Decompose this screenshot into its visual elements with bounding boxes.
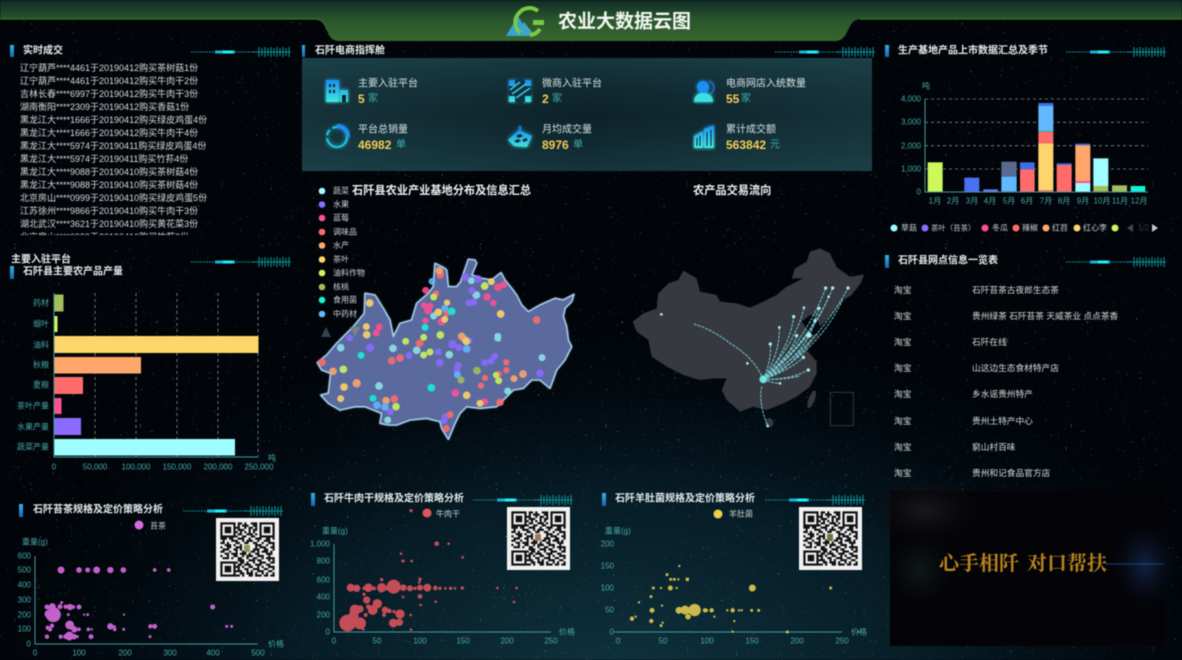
- video panel: 心手相阡 对口帮扶: [939, 552, 1107, 575]
- chart: stacked bars: 3月: [966, 196, 978, 206]
- heading: crop output: [10, 257, 291, 279]
- video panel: [865, 475, 1177, 646]
- table: outlets: 淘宝: [894, 336, 912, 347]
- chart: horizontal bars: 茶叶产量: [17, 400, 49, 410]
- chart: morel scatter: [601, 526, 867, 646]
- header banner: [0, 0, 1182, 41]
- map: China with flow lines: [633, 248, 864, 427]
- legend: base types: 水果: [333, 199, 349, 209]
- legend: production: 辣椒: [1022, 222, 1038, 232]
- chart: beef scatter: [310, 510, 575, 646]
- chart: horizontal bars: 夏粮: [33, 380, 49, 390]
- icon: person: [694, 81, 714, 102]
- chart: tea scatter: 价格: [268, 638, 284, 648]
- heading: morel: [602, 492, 865, 506]
- chart: stacked bars: 5月: [1003, 196, 1015, 206]
- chart: beef scatter: 0: [326, 628, 331, 636]
- metric: online stores: 电商网店入统数量: [726, 76, 806, 90]
- chart: stacked bars: 2,000: [901, 142, 922, 150]
- chart: morel scatter: 250: [835, 636, 849, 646]
- chart: horizontal bars: 150,000: [163, 462, 192, 472]
- panel: county base map: [317, 183, 574, 439]
- legend: beef: 牛肉干: [436, 508, 460, 518]
- metric: wechat platforms: 微商入驻平台: [542, 76, 602, 90]
- chart: tea scatter: 0: [27, 640, 32, 648]
- chart: stacked bars: 8月: [1058, 196, 1070, 206]
- legend: production: 冬瓜: [992, 222, 1008, 232]
- chart: horizontal bars: 药材: [33, 298, 49, 308]
- chart: stacked bars: 2月: [947, 196, 959, 206]
- icon: towers: [694, 125, 714, 148]
- metric: wechat platforms: 家: [552, 92, 562, 104]
- chart: morel scatter: 100: [700, 636, 714, 646]
- panel: e-commerce dashboard: [302, 44, 875, 171]
- metric: total turnover: 累计成交额: [726, 122, 776, 136]
- chart: stacked bars: 1,000: [901, 164, 922, 174]
- table: outlets: 窮山村百味: [972, 441, 1016, 452]
- metric: total sales: 单: [396, 138, 406, 150]
- chart: horizontal bars: 50,000: [83, 462, 108, 472]
- chart: horizontal bars: 油料: [33, 340, 49, 350]
- chart: beef scatter: 价格: [559, 626, 575, 636]
- heading: beef: 石阡牛肉干规格及定价策略分析: [324, 492, 464, 504]
- chart: horizontal bars: 100,000: [122, 462, 151, 472]
- chart: beef scatter: 150: [456, 636, 470, 646]
- metric: wechat platforms: [509, 76, 602, 106]
- legend: base types: 核桃: [333, 282, 349, 292]
- metric: total sales: 46982: [358, 138, 392, 152]
- metric: monthly volume: 月均成交量: [542, 122, 592, 136]
- chart: beef scatter: 250: [544, 636, 558, 646]
- legend: beef: [422, 508, 460, 518]
- legend: base types: 油料作物: [333, 268, 365, 278]
- chart: beef scatter: 100: [413, 636, 427, 646]
- table: outlets: 淘宝: [894, 310, 912, 321]
- heading: trade flow: 农产品交易流向: [693, 183, 771, 197]
- chart: beef scatter: 200: [317, 610, 331, 620]
- legend: tea: 苔茶: [150, 520, 166, 530]
- QR code: tea: [216, 518, 279, 581]
- text block: deal list: 黑龙江大****5974于20190411购买绿皮鸡蛋4份: [20, 140, 206, 151]
- legend: production: 红苕: [1052, 222, 1068, 232]
- chart: horizontal bars: 200,000: [204, 462, 233, 472]
- chart: stacked bars: [901, 80, 1148, 206]
- chart: morel scatter: 50: [605, 606, 615, 614]
- panel: production by month: [885, 44, 1166, 232]
- panel background: [302, 58, 872, 171]
- table: outlets: 淘宝: [894, 362, 912, 373]
- metric: monthly volume: 单: [573, 138, 583, 150]
- heading: outlets: 石阡县网点信息一览表: [898, 254, 998, 266]
- legend: tea: [134, 520, 166, 530]
- chart: morel scatter: 150: [745, 636, 759, 646]
- heading: crop output: 石阡县主要农产品产量: [23, 264, 123, 278]
- chart: horizontal bars: 水果产量: [17, 422, 49, 432]
- chart: morel scatter: 50: [659, 636, 668, 646]
- chart: tea scatter: 300: [163, 648, 177, 658]
- text block: deal list: 北京房山****0999于20190410购买绿皮鸡蛋5份: [20, 192, 207, 203]
- heading: production: 生产基地产品上市数据汇总及季节: [898, 44, 1048, 56]
- chart: morel scatter: 200: [790, 636, 804, 646]
- metric: main platforms: 家: [368, 92, 378, 104]
- metric: main platforms: [326, 76, 418, 106]
- metric: online stores: 家: [741, 92, 751, 104]
- metric: total turnover: [694, 122, 780, 152]
- table: outlets: 乡水谣贵州特产: [972, 388, 1033, 399]
- chart: tea scatter: 600: [18, 552, 32, 560]
- legend: base types: 水产: [333, 240, 349, 250]
- chart: stacked bars: 10月: [1094, 196, 1110, 206]
- chart: beef scatter: 50: [373, 636, 382, 646]
- chart: horizontal bars: [17, 293, 276, 472]
- table: outlets: 石阡在线: [972, 336, 1007, 347]
- table: outlets: 山这边生态食材特产店: [972, 362, 1059, 373]
- chart: stacked bars: 9月: [1077, 196, 1089, 206]
- icon: building: [326, 80, 348, 102]
- panel: outlet table: [885, 254, 1166, 478]
- chart: tea scatter: 100: [72, 648, 86, 658]
- table: outlets: 贵州和记食品官方店: [972, 467, 1050, 478]
- text block: deal list: 辽宁葫芦****4461于20190412购买牛肉干2份: [20, 75, 198, 86]
- table: outlets: 淘宝: [894, 284, 912, 295]
- panel: trade flow map: [633, 183, 864, 427]
- chart: stacked bars: 11月: [1112, 196, 1128, 206]
- text block: deal list: 江苏徐州****9866于20190410购买牛肉干3份: [20, 205, 198, 216]
- metric: main platforms: 5: [358, 92, 365, 106]
- panel: main crop output: [10, 252, 291, 472]
- chart: beef scatter: 1,000: [310, 540, 331, 548]
- chart: beef scatter: 200: [500, 636, 514, 646]
- title: 农业大数据云图: [558, 10, 691, 32]
- heading: platforms: 主要入驻平台: [11, 252, 71, 266]
- chart: morel scatter: 200: [601, 540, 615, 548]
- legend: base types: 中药材: [333, 308, 357, 318]
- chart: morel scatter: 重量(g): [605, 526, 631, 536]
- metric: main platforms: 主要入驻平台: [358, 76, 418, 90]
- heading: outlets: [885, 254, 1166, 268]
- map: county outline with points: [317, 259, 574, 439]
- heading: tea: [19, 502, 283, 517]
- chart: stacked bars: 12月: [1131, 196, 1147, 206]
- chart: horizontal bars: 吨: [268, 452, 276, 462]
- chart: beef scatter: 400: [317, 592, 331, 602]
- chart: tea scatter: 300: [18, 596, 32, 604]
- icon: tray: [508, 126, 532, 147]
- chart: beef scatter: 600: [317, 576, 331, 584]
- panel: realtime deals: [10, 44, 291, 242]
- legend: base types: 茶叶: [333, 254, 349, 264]
- legend: morel: [714, 508, 753, 518]
- table: outlets: 贵州土特产中心: [972, 415, 1033, 426]
- chart: stacked bars: 3,000: [901, 118, 922, 126]
- text block: deal list: 黑龙江大****1666于20190412购买绿皮鸡蛋4份: [20, 114, 207, 125]
- chart: tea scatter: 200: [118, 648, 132, 658]
- chart: morel scatter: 0: [616, 636, 621, 646]
- text block: deal list: 黑龙江大****9088于20190410购买茶树菇4份: [20, 179, 198, 190]
- icon: grid diagonal: [509, 80, 531, 102]
- table: outlets: 淘宝: [894, 415, 912, 426]
- text block: deal list: 吉林长春****6997于20190412购买牛肉干3份: [20, 88, 198, 99]
- QR code: beef: [507, 507, 570, 570]
- legend: base types: 蔬菜: [333, 186, 349, 196]
- metric: total turnover: 元: [770, 140, 780, 150]
- chart: stacked bars: 0: [917, 188, 922, 196]
- table: outlets: 淘宝: [894, 441, 912, 452]
- metric: monthly volume: [508, 122, 592, 152]
- heading: e-commerce: 石阡电商指挥舱: [315, 44, 385, 56]
- chart: horizontal bars: 烟叶: [33, 320, 49, 328]
- heading: tea: 石阡苔茶规格及定价策略分析: [33, 502, 163, 516]
- chart: horizontal bars: 250,000: [245, 462, 274, 472]
- table: outlets: 淘宝: [894, 467, 912, 478]
- metric: total sales: 平台总销量: [358, 122, 408, 136]
- text block: deal list: 黑龙江大****9088于20190410购买茶树菇4份: [20, 166, 198, 177]
- chart: stacked bars: 7月: [1040, 196, 1052, 206]
- chart: stacked bars: 吨: [922, 80, 930, 90]
- legend: production: 草菇: [901, 222, 917, 232]
- chart: stacked bars: 6月: [1021, 196, 1033, 206]
- metric: wechat platforms: 2: [542, 92, 549, 106]
- heading: realtime deals: [10, 44, 291, 57]
- metric: total sales: [327, 122, 408, 152]
- heading: morel: 石阡羊肚菌规格及定价策略分析: [615, 492, 755, 504]
- chart: beef scatter: 重量(g): [322, 526, 348, 536]
- chart: horizontal bars: 秋粮: [33, 360, 49, 370]
- chart: beef scatter: 0: [332, 636, 337, 646]
- chart: tea scatter: 400: [18, 580, 32, 590]
- chart: tea scatter: 400: [206, 648, 220, 658]
- chart: tea scatter: 200: [18, 610, 32, 620]
- metric: monthly volume: 8976: [542, 138, 569, 152]
- legend: production: [890, 222, 1158, 232]
- chart: morel scatter: 0: [610, 628, 615, 636]
- chart: tea scatter: 0: [33, 648, 38, 658]
- icon: ring: [327, 126, 348, 147]
- text block: deal list: 湖南衡阳****2309于20190412购买香菇1份: [20, 101, 189, 112]
- chart: morel scatter: 价格: [851, 626, 867, 636]
- chart: stacked bars: 4月: [984, 196, 996, 206]
- panel: morel scatter: [601, 492, 867, 646]
- metric: online stores: [694, 76, 806, 106]
- QR code: morel: [799, 507, 862, 570]
- chart: stacked bars: 1月: [929, 196, 941, 206]
- table: outlets: [894, 284, 1119, 478]
- legend: production: 红心李: [1083, 222, 1107, 232]
- legend: base types: 蓝莓: [333, 212, 349, 222]
- table: outlets: 贵州绿茶 石阡苔茶 天威茶业 点点茶香: [972, 310, 1119, 321]
- legend: morel: 羊肚菌: [729, 508, 753, 518]
- chart: horizontal bars: 蔬菜产量: [17, 442, 49, 452]
- legend: production: 1/2: [1138, 224, 1150, 232]
- heading: realtime deals: 实时成交: [23, 44, 63, 56]
- chart: tea scatter: 500: [251, 648, 265, 658]
- chart: beef scatter: 800: [317, 556, 331, 566]
- text block: deal list: [20, 62, 207, 242]
- heading: production: [885, 44, 1166, 57]
- metric: total turnover: 563842: [726, 138, 766, 152]
- metric: online stores: 55: [726, 92, 740, 106]
- chart: morel scatter: 150: [601, 562, 615, 570]
- table: outlets: 石阡苔茶古夜郎生态茶: [972, 284, 1059, 295]
- legend: base types: 调味品: [333, 226, 357, 236]
- chart: stacked bars: 4,000: [901, 94, 922, 104]
- legend: production: 茶叶（苔茶）: [931, 224, 975, 232]
- chart: morel scatter: 100: [601, 584, 615, 592]
- panel: tea scatter: [18, 502, 284, 658]
- legend: base types: 食用菌: [333, 294, 357, 304]
- icon: logo: [506, 8, 544, 36]
- table: outlets: 淘宝: [894, 388, 912, 399]
- chart: horizontal bars: 0: [52, 462, 57, 472]
- panel: beef jerky scatter: [310, 492, 575, 646]
- text block: deal list: 湖北武汉****3621于20190410购买黄花菜3份: [20, 218, 198, 229]
- text block: deal list: 黑龙江大****5974于20190411购买竹荪4份: [20, 153, 188, 164]
- heading: beef: [311, 492, 573, 506]
- chart: tea scatter: 500: [18, 566, 32, 574]
- heading: e-commerce: [302, 44, 875, 57]
- text block: deal list: 辽宁葫芦****4461于20190412购买茶树菇1份: [20, 62, 198, 73]
- legend: base types: [319, 186, 365, 337]
- chart: tea scatter: 100: [18, 624, 32, 634]
- text block: deal list: 黑龙江大****1666于20190412购买牛肉干4份: [20, 127, 198, 138]
- text block: deal list: 北京房山****0999于20190410购买竹荪3份: [20, 231, 189, 242]
- heading: county map: 石阡县农业产业基地分布及信息汇总: [352, 183, 531, 197]
- chart: tea scatter: 重量(g): [22, 536, 48, 546]
- chart: tea scatter: [18, 536, 284, 658]
